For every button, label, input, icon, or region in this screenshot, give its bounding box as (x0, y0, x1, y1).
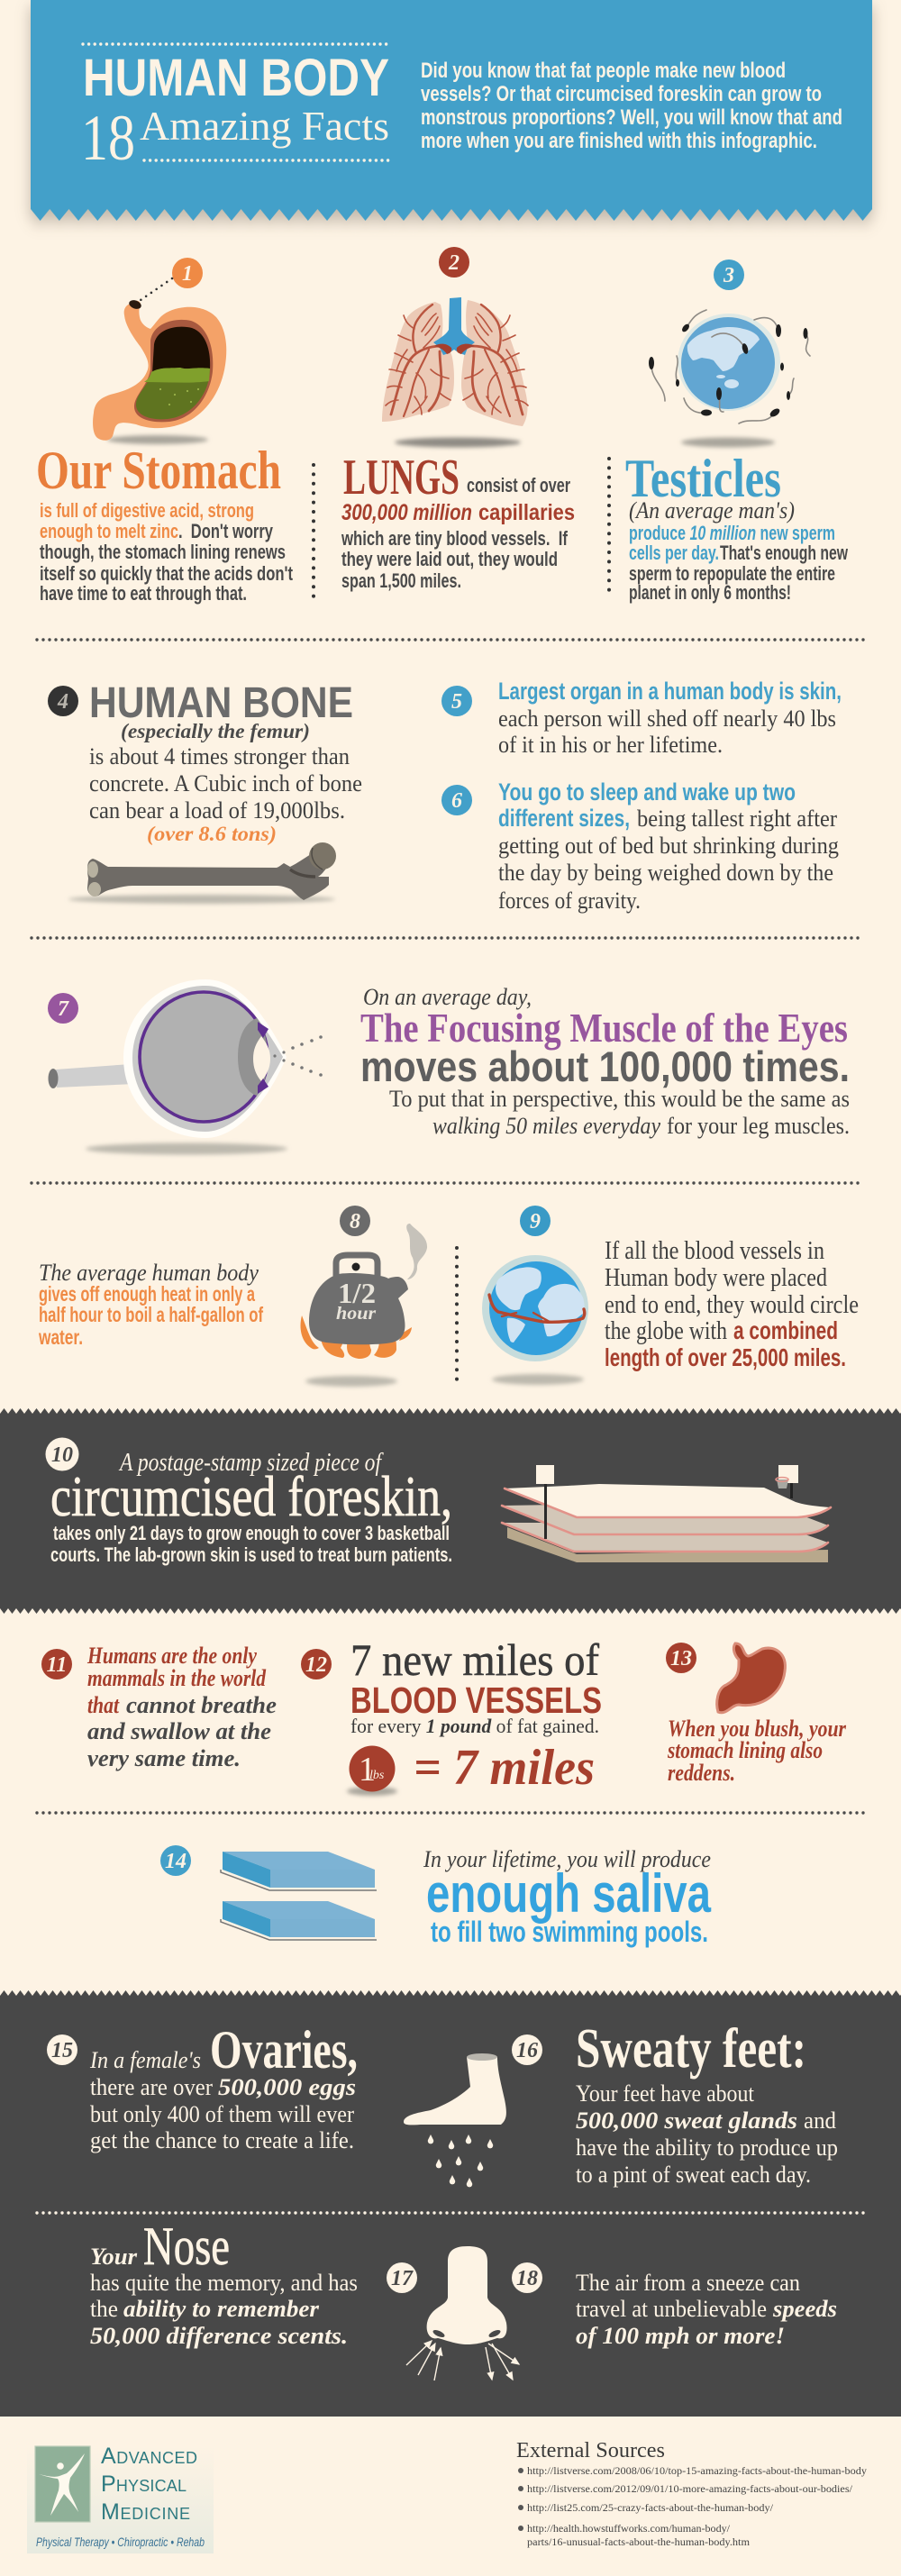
nose text: 50,000 difference scents. (90, 2323, 348, 2349)
eye text: for your leg muscles. (667, 1113, 850, 1139)
badge 9: 9 (530, 1210, 541, 1233)
badge 13: 13 (670, 1647, 692, 1670)
badge 4: 4 (57, 690, 68, 714)
foreskin text: courts. The lab-grown skin is used to treat burn patients. (50, 1543, 452, 1566)
sneeze text: of 100 mph or more! (576, 2323, 785, 2349)
nose text: Your (90, 2244, 138, 2270)
logo wordmark (101, 2444, 197, 2525)
testicles text: planet in only 6 months! (629, 581, 791, 604)
badge 17: 17 (391, 2267, 414, 2290)
breathe text: cannot breathe (126, 1692, 277, 1718)
badge 14: 14 (165, 1850, 187, 1873)
fact 16: sweaty feet (512, 2018, 838, 2188)
panel background (0, 1990, 901, 2417)
sweaty feet text: and (804, 2107, 836, 2134)
ovaries text: In a female's (89, 2047, 201, 2073)
sources list: http://list25.com/25-crazy-facts-about-the-human-body/ (527, 2501, 774, 2514)
fact 14: saliva (160, 1845, 711, 1948)
icon: femur bone (68, 842, 336, 904)
heat text: water. (38, 1325, 83, 1349)
heading: our stomach: Our Stomach (36, 441, 281, 500)
sources list: parts/16-unusual-facts-about-the-human-body.htm (527, 2535, 751, 2548)
badge 10 (45, 1438, 79, 1470)
sizes text: being tallest right after (637, 806, 837, 832)
icon: lungs (382, 297, 528, 447)
bone text: (especially the femur) (121, 720, 310, 742)
badge 15 (47, 2034, 77, 2065)
badge 9 (520, 1206, 551, 1236)
dark panel: facts 15-18 (0, 1990, 901, 2417)
breathe text: very same time. (87, 1745, 241, 1771)
nose text: the (90, 2296, 118, 2322)
fact 8: body heat (38, 1206, 427, 1387)
vessels text: the globe with (605, 1317, 727, 1345)
badge 13 (666, 1643, 696, 1673)
banner shape (31, 0, 872, 222)
badge 1: 1 (182, 262, 193, 286)
fact 2: lungs (341, 247, 575, 592)
logo mark (35, 2446, 90, 2522)
badge 4 (48, 686, 78, 716)
sneeze text: speeds (772, 2296, 837, 2322)
badge 8: 8 (350, 1210, 360, 1233)
logo background (27, 2446, 214, 2553)
lungs text: 300,000 million (341, 500, 472, 525)
external sources (516, 2439, 867, 2548)
stomach text (40, 499, 294, 605)
skin text: each person will shed off nearly 40 lbs (498, 705, 836, 732)
fact 13: stomach blush (666, 1643, 847, 1786)
ovaries text (89, 2020, 358, 2153)
sizes text: different sizes, (498, 805, 630, 832)
badge 2: 2 (448, 251, 460, 275)
vessels heading (350, 1634, 602, 1737)
panel background (0, 1408, 901, 1614)
logo wordmark: MEDICINE (101, 2499, 190, 2525)
blush text: reddens. (668, 1760, 735, 1786)
skin text: of it in his or her lifetime. (498, 732, 723, 758)
badge 11 (41, 1649, 72, 1679)
vessels heading: BLOOD VESSELS (350, 1679, 602, 1721)
badge 6: 6 (451, 789, 462, 813)
fact 15: ovaries (47, 2020, 358, 2153)
foreskin text: A postage-stamp sized piece of (118, 1449, 384, 1477)
breathe text: Humans are the only (86, 1643, 257, 1669)
icon: foot with sweat drops (404, 2053, 506, 2187)
sources list (518, 2464, 867, 2548)
badge 15: 15 (51, 2039, 73, 2062)
sizes text: getting out of bed but shrinking during (498, 833, 839, 859)
icon: globe with vessel (482, 1255, 588, 1385)
nose text: has quite the memory, and has (90, 2270, 358, 2296)
equation: 1 lbs = 7 miles: 1 (359, 1751, 376, 1789)
lungs text: span 1,500 miles. (341, 569, 461, 592)
sizes text: the day by being weighed down by the (498, 860, 833, 886)
ovaries text: there are over (90, 2074, 213, 2100)
breathe text: that (87, 1692, 120, 1718)
logo wordmark: ADVANCED (101, 2444, 197, 2469)
blush text: stomach lining also (667, 1737, 823, 1763)
lungs text: which are tiny blood vessels. If (341, 527, 569, 550)
fact 4: human bone (48, 679, 362, 904)
bone text: is about 4 times stronger than (89, 743, 350, 769)
stomach text: is full of digestive acid, strong (40, 499, 254, 522)
breathe text: mammals in the world (87, 1665, 267, 1691)
heading: human bone: HUMAN BONE (89, 679, 353, 727)
breathe text (86, 1643, 277, 1771)
skin text (498, 678, 842, 758)
blush text: When you blush, your (668, 1716, 847, 1742)
sweaty feet text: to a pint of sweat each day. (576, 2162, 811, 2188)
bone text (89, 720, 362, 845)
ovaries text: get the chance to create a life. (90, 2127, 354, 2153)
badge 3: 3 (723, 264, 734, 287)
testicles text: cells per day. (629, 542, 719, 564)
logo wordmark: PHYSICAL (101, 2471, 187, 2497)
fact 3: testicles (625, 259, 849, 604)
sweaty feet text: have the ability to produce up (576, 2135, 838, 2161)
heat text (38, 1260, 263, 1349)
equation: 1 lbs = 7 miles: = 7 miles (414, 1740, 595, 1796)
saliva text: enough saliva (426, 1863, 711, 1924)
foreskin text (50, 1449, 452, 1566)
badge 14 (160, 1845, 191, 1876)
vessels heading: for every 1 pound of fat gained. (350, 1715, 599, 1737)
icon: stacked basketball courts (502, 1465, 831, 1562)
stomach text: enough to melt zinc (40, 520, 178, 542)
nose text (90, 2216, 358, 2349)
saliva text: to fill two swimming pools. (431, 1916, 708, 1948)
vessels text: a combined (733, 1316, 838, 1344)
fact 17: nose memory (90, 2216, 417, 2349)
foreskin text: takes only 21 days to grow enough to cover 3 basketball (53, 1522, 450, 1544)
sweaty feet text: Your feet have about (576, 2080, 755, 2107)
testicles text: That's enough new (720, 542, 849, 564)
eye text (360, 984, 850, 1139)
eye text: To put that in perspective, this would be the same as (389, 1086, 850, 1112)
fact 18: sneeze (512, 2262, 837, 2349)
foreskin text: circumcised foreskin, (50, 1464, 452, 1528)
badge 3 (714, 259, 744, 290)
lungs text: LUNGS (343, 450, 460, 505)
ovaries text: 500,000 eggs (218, 2074, 356, 2100)
badge 5 (441, 686, 472, 716)
sources heading: External Sources (516, 2439, 665, 2462)
lungs text: consist of over (467, 474, 570, 496)
badge 10: 10 (51, 1443, 73, 1467)
fact 9: blood vessels round the globe (482, 1206, 859, 1385)
heat text: half hour to boil a half-gallon of (39, 1303, 263, 1326)
title: 18 (81, 102, 135, 174)
fact 1: stomach (36, 258, 294, 605)
icon: two swimming pools (221, 1852, 377, 1940)
lungs text: they were laid out, they would (341, 548, 558, 570)
title (81, 44, 391, 174)
logo tagline: Physical Therapy • Chiropractic • Rehab (36, 2535, 205, 2549)
heat text: gives off enough heat in only a (39, 1282, 255, 1306)
badge 12: 12 (305, 1653, 327, 1677)
badge 18: 18 (516, 2267, 538, 2290)
header banner (31, 0, 872, 222)
stomach text: itself so quickly that the acids don't (40, 562, 294, 585)
bone text: can bear a load of 19,000lbs. (89, 797, 345, 824)
icon: boiling kettle: hour (336, 1304, 376, 1324)
badge 16 (512, 2034, 542, 2065)
vessels text: end to end, they would circle (605, 1291, 859, 1319)
bone text: (over 8.6 tons) (147, 823, 277, 845)
sizes text: forces of gravity. (498, 887, 641, 914)
eye text: On an average day, (363, 984, 532, 1010)
testicles text: Testicles (625, 449, 781, 508)
fact 11: breathe and swallow (41, 1643, 277, 1771)
stomach text: have time to eat through that. (40, 582, 247, 605)
icon: boiling kettle (301, 1224, 427, 1387)
ovaries text: but only 400 of them will ever (90, 2101, 354, 2127)
fact 7: eye muscle (48, 979, 850, 1155)
testicles text: produce 10 million new sperm (629, 522, 835, 544)
icon: globe with sperm (649, 310, 810, 447)
sneeze text (576, 2270, 837, 2349)
vessels heading: 7 new miles of (350, 1634, 599, 1685)
testicles text (625, 449, 849, 604)
sweaty feet text (576, 2018, 838, 2188)
sources list: http://health.howstuffworks.com/human-body/ (527, 2522, 731, 2535)
badge 18 (512, 2262, 542, 2293)
fact 6: two sizes (441, 778, 839, 914)
badge 5: 5 (451, 690, 462, 714)
badge 16: 16 (516, 2039, 538, 2062)
fact 12: blood vessels per pound (301, 1634, 602, 1796)
lungs text (341, 450, 575, 592)
sweaty feet text: Sweaty feet: (576, 2018, 806, 2080)
badge 7 (48, 993, 78, 1024)
badge 8 (340, 1206, 370, 1236)
stomach text: though, the stomach lining renews (40, 541, 286, 563)
sneeze text: travel at unbelievable (576, 2296, 767, 2322)
sneeze text: The air from a sneeze can (576, 2270, 800, 2296)
sizes text (498, 778, 839, 914)
ovaries text: Ovaries, (210, 2020, 358, 2080)
eye text: walking 50 miles everyday (432, 1113, 660, 1139)
footer logo: advanced physical medicine (27, 2444, 214, 2553)
sources list: http://listverse.com/2012/09/01/10-more-amazing-facts-about-our-bodies/ (527, 2482, 853, 2495)
blush text (667, 1716, 847, 1786)
heat text: The average human body (39, 1260, 259, 1286)
fact 5: skin (441, 678, 842, 758)
lungs text: capillaries (478, 500, 575, 525)
badge 7: 7 (58, 997, 69, 1021)
intro paragraph: Did you know that fat people make new blood (421, 59, 786, 83)
equation: 1 lbs = 7 miles: lbs (369, 1769, 385, 1782)
bone text: concrete. A Cubic inch of bone (89, 770, 362, 796)
badge 6 (441, 785, 472, 815)
icon: eye cross-section (49, 979, 323, 1155)
icon: boiling kettle: 1/2 (338, 1277, 376, 1309)
breathe text: and swallow at the (87, 1718, 271, 1744)
icon: stomach with acid (93, 278, 226, 444)
badge 17 (387, 2262, 417, 2293)
sizes text: You go to sleep and wake up two (498, 778, 796, 806)
testicles text: (An average man's) (629, 497, 795, 523)
title: HUMAN BODY (83, 49, 389, 107)
dark panel: fact 10 foreskin (0, 1408, 901, 1614)
vessels text: If all the blood vessels in (605, 1237, 824, 1265)
nose text: Nose (143, 2216, 230, 2276)
intro paragraph (421, 59, 842, 153)
title: Amazing Facts (140, 103, 389, 149)
icon: nose with air arrows (406, 2246, 519, 2380)
badge 11: 11 (47, 1653, 67, 1677)
badge 1 (172, 258, 203, 288)
saliva text: In your lifetime, you will produce (423, 1846, 711, 1872)
saliva text (423, 1846, 711, 1948)
vessels text (605, 1237, 859, 1371)
icon: red stomach (717, 1643, 785, 1713)
sweaty feet text: 500,000 sweat glands (576, 2107, 797, 2134)
sources list: http://listverse.com/2008/06/10/top-15-amazing-facts-about-the-human-body (527, 2464, 867, 2477)
badge 2 (439, 247, 469, 278)
nose text: ability to remember (123, 2296, 320, 2322)
badge 12 (301, 1649, 332, 1679)
stomach text: . Don't worry (178, 520, 274, 542)
vessels text: Human body were placed (605, 1264, 827, 1292)
